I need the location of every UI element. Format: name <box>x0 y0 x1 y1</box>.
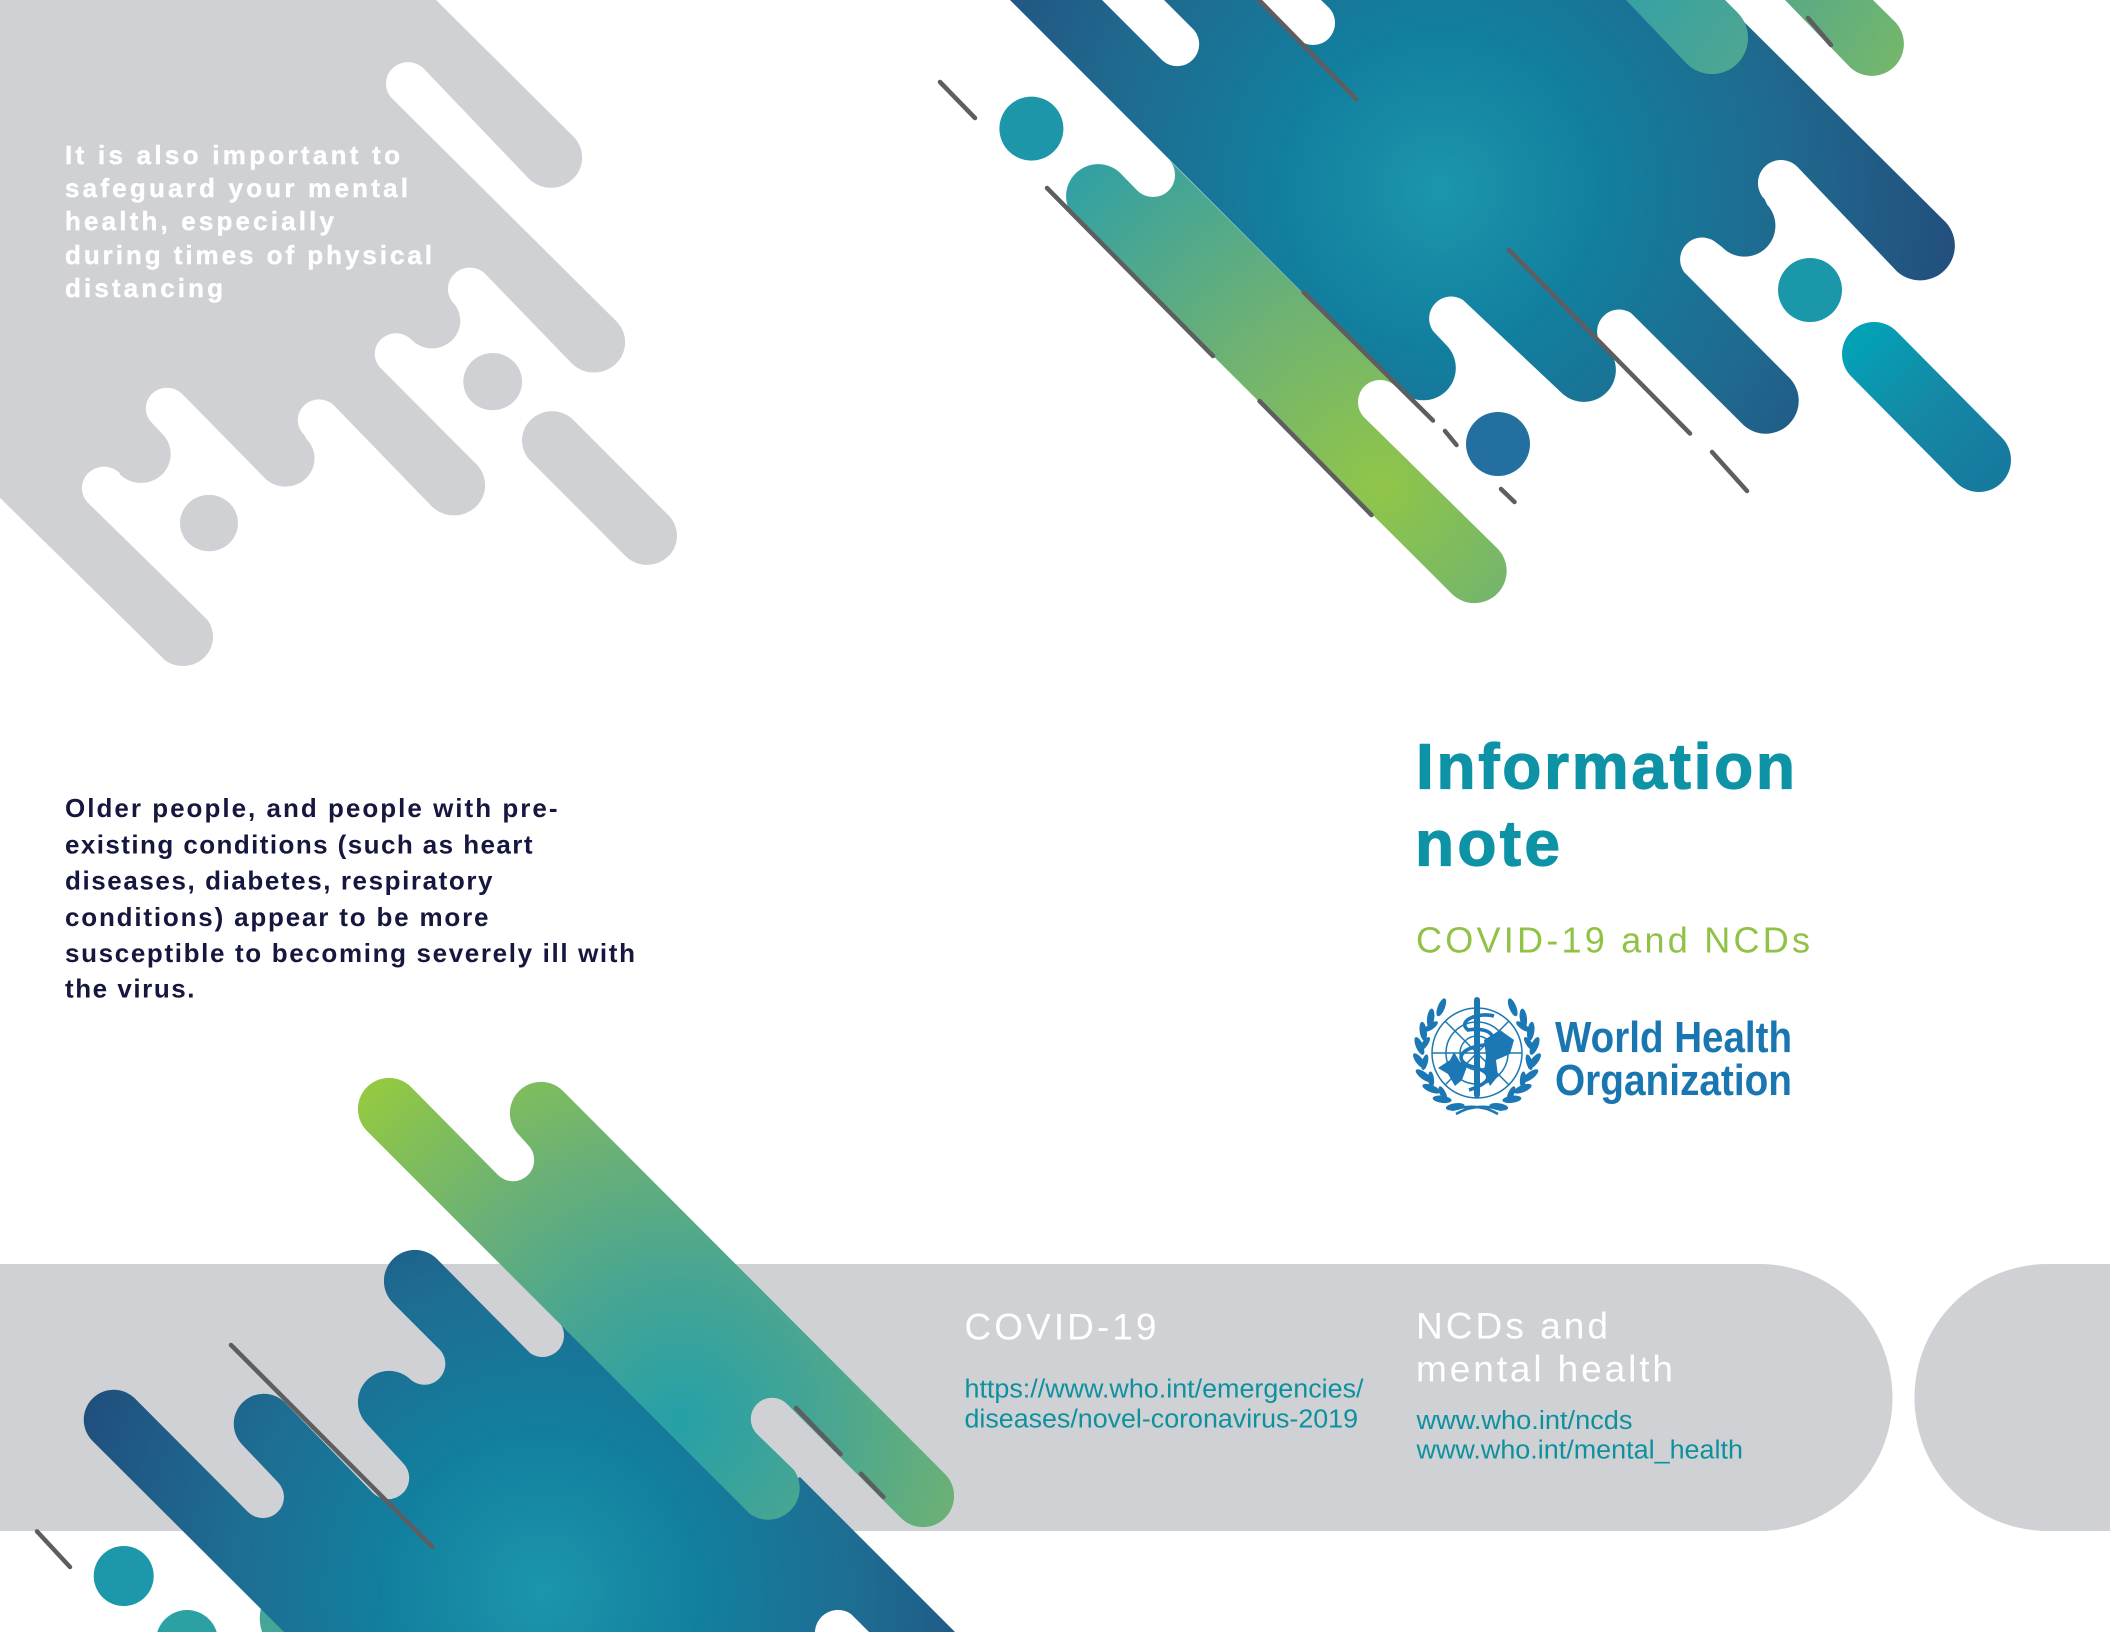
icon: grey dot lower <box>180 495 238 551</box>
shape: green drip <box>358 1078 954 1527</box>
icon: blue circle <box>1466 412 1530 476</box>
text block: mental health message <box>65 140 432 303</box>
text block: mental health message: safeguard your mental <box>65 173 408 203</box>
text block: older people message: susceptible to becoming severely ill with <box>65 938 635 968</box>
icon: WHO emblem <box>1411 997 1543 1114</box>
text block: older people message: diseases, diabetes, respiratory <box>65 866 493 896</box>
shape: green drip <box>1066 159 1507 603</box>
title: Information note: Information <box>1416 730 1795 802</box>
link lines: www.who.int/mental_health <box>1415 1436 1743 1464</box>
wordmark: Organization <box>1555 1056 1792 1105</box>
link lines: https://www.who.int/emergencies/ <box>964 1375 1364 1403</box>
text block: mental health message: health, especially <box>65 206 335 236</box>
link lines <box>964 1375 1364 1433</box>
icon: teal circle <box>94 1546 154 1606</box>
shape: green sliver <box>260 1608 285 1632</box>
text block: older people message <box>65 793 635 1004</box>
text block: older people message: conditions) appear to be more <box>65 902 488 932</box>
shape: teal circle fragment <box>156 1610 218 1632</box>
subtitle: COVID-19 and NCDs: COVID-19 and NCDs <box>1416 919 1810 960</box>
wreath left <box>1411 997 1465 1112</box>
text block: mental health message: distancing <box>65 273 223 303</box>
text block: NCDs and mental health links <box>1415 1305 1743 1464</box>
logo: World Health Organization <box>1411 997 1792 1114</box>
heading: COVID-19: COVID-19 <box>964 1306 1156 1347</box>
shape: teal finger <box>1626 0 1748 74</box>
heading: NCDs and mental health <box>1416 1305 1673 1390</box>
link lines: www.who.int/ncds <box>1415 1407 1632 1435</box>
link lines: diseases/novel-coronavirus-2019 <box>964 1405 1358 1433</box>
text block: mental health message: It is also important to <box>65 140 400 170</box>
wordmark <box>1555 1013 1792 1105</box>
heading: NCDs and mental health: mental health <box>1416 1349 1673 1390</box>
text block: older people message: the virus. <box>65 974 194 1004</box>
icon: grey dot upper <box>463 353 522 410</box>
text block: COVID-19 links <box>964 1306 1364 1433</box>
shape: blue drip <box>1010 0 1955 434</box>
heading: NCDs and mental health: NCDs and <box>1416 1305 1608 1346</box>
panel: colourful drip graphic bottom left <box>37 1078 955 1632</box>
accent lines <box>940 0 1831 515</box>
wordmark: World Health <box>1555 1013 1792 1062</box>
shape: blue drip <box>84 1250 955 1632</box>
text block: mental health message: during times of physical <box>65 240 432 270</box>
text block: older people message: Older people, and people with pre- <box>65 793 558 823</box>
text block: older people message: existing conditions (such as heart <box>65 830 533 860</box>
icon: teal circle left <box>999 97 1063 161</box>
wreath right <box>1489 997 1543 1112</box>
panel: grey drip shape top left <box>0 0 647 666</box>
link lines <box>1415 1407 1743 1464</box>
title: Information note: note <box>1415 808 1560 880</box>
globe <box>1432 1008 1522 1114</box>
panel: grey footer band <box>0 1264 1892 1531</box>
panel: grey footer end cap <box>1914 1264 2110 1531</box>
panel: colourful drip graphic top right <box>940 0 1979 603</box>
shape: green finger <box>1785 0 1904 76</box>
staff and serpent <box>1461 1000 1494 1095</box>
land masses <box>1438 1030 1514 1086</box>
icon: grey pill <box>552 440 647 536</box>
icon: teal circle right <box>1778 258 1842 322</box>
shape: teal pill <box>1874 354 1979 460</box>
accent lines <box>37 1345 883 1567</box>
title: Information note <box>1415 730 1795 880</box>
